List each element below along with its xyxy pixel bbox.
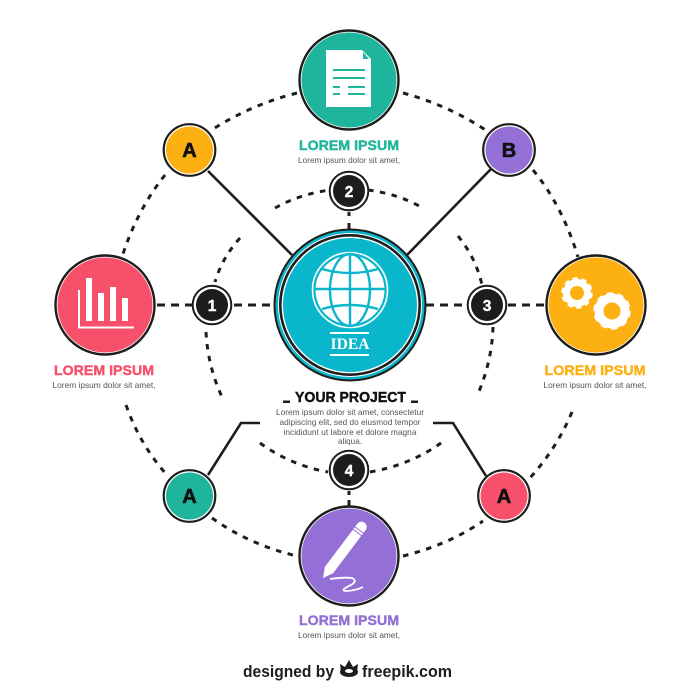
top circle: document [300,30,398,130]
left label: LOREM IPSUM [54,362,154,378]
node 4 [330,451,368,489]
left circle: chart [56,256,154,354]
badge A bottom left: A [182,486,197,508]
idea label [330,332,370,356]
top label: LOREM IPSUM [299,137,399,153]
your project text: adipiscing elit, sed do eiusmod tempor [280,417,421,427]
badge A bottom left [164,470,215,522]
right label [544,362,646,390]
node 2: 2 [345,184,353,201]
icon: freepik logo [340,660,358,677]
node 1 [193,286,231,324]
node 3: 3 [483,298,492,315]
your project heading: YOUR PROJECT [295,389,406,406]
right label: Lorem ipsum dolor sit amet, [544,380,646,390]
your project text: aliqua. [338,436,362,446]
top label: Lorem ipsum dolor sit amet, [298,155,400,165]
node 4: 4 [345,463,354,480]
footer credit: freepik.com [362,662,452,681]
node 2 [330,172,368,210]
your project text: Lorem ipsum dolor sit amet, consectetur [276,407,424,417]
right label: LOREM IPSUM [544,362,646,378]
footer credit: designed by [243,662,334,681]
node 3 [468,286,506,324]
icon: gears [563,279,629,328]
badge A bottom right [478,470,530,522]
badge A top left [164,124,215,176]
icon: globe [312,252,388,328]
badge B top right [483,124,535,176]
badge A bottom right: A [497,486,511,508]
your project text: incididunt ut labore et dolore magna [284,427,417,437]
bottom label: Lorem ipsum dolor sit amet, [298,630,400,640]
central idea circle [274,230,426,380]
bottom circle: pencil [300,506,398,606]
node 1: 1 [208,298,217,315]
solid connector lines [208,169,491,476]
badge A top left: A [182,140,197,162]
left label [52,362,156,390]
footer credit [243,660,452,681]
bottom label: LOREM IPSUM [299,612,399,628]
your project text [276,407,424,446]
left label: Lorem ipsum dolor sit amet, [52,380,156,390]
inner dashed ring [206,190,493,506]
outer dashed ring [122,93,578,556]
idea label: IDEA [330,336,370,353]
badge B top right: B [502,140,516,162]
icon: pencil [319,520,369,591]
right circle: gears [546,256,646,354]
bottom label [298,612,400,640]
top label [298,137,400,165]
icon: document [326,50,371,107]
horizontal dashed connectors [157,304,544,306]
icon: bar chart [78,278,134,328]
